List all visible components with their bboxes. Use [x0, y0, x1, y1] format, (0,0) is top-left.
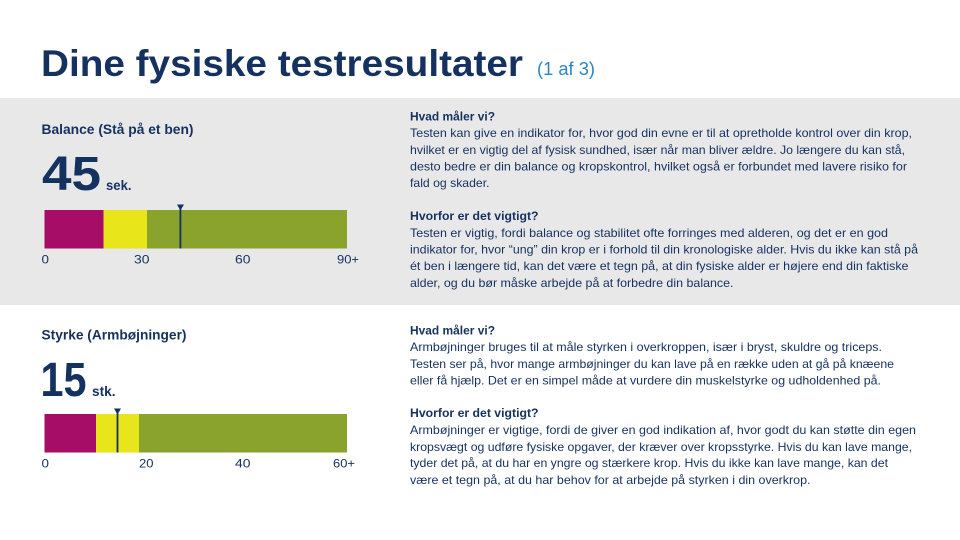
result value: 45 sek.: 45: [42, 147, 101, 201]
bar chart: strength: 40: [235, 456, 251, 470]
text block: balance, why it matters: indikator for, hvor “ung” din krop er i forhold til din kronologiske alder. Hvis du ikke kan stå på: [410, 242, 918, 256]
heading: strength: Styrke (Armbøjninger): [42, 328, 186, 342]
title: (1 af 3): [537, 59, 595, 79]
text block: strength, why it matters: Hvorfor er det vigtigt?: [410, 406, 538, 420]
text block: strength, why it matters: Armbøjninger er vigtige, fordi de giver en god indikation af, hvor godt du kan støtte din egen: [410, 423, 916, 437]
result value: 45 sek.: sek.: [106, 178, 132, 193]
text block: strength, what we measure: [410, 324, 894, 388]
text block: strength, what we measure: Armbøjninger bruges til at måle styrken i overkroppen, især i bryst, skuldre og triceps.: [410, 340, 882, 354]
text block: balance, what we measure: hvilket er en vigtig del af fysisk sundhed, især når man bliver ældre. Jo længere du kan stå,: [410, 143, 905, 157]
panel: strength: [40, 328, 355, 470]
bar chart: balance: [42, 204, 359, 266]
text block: strength, why it matters: kropsvægt og udføre fysiske opgaver, der kræver over kropsstyrke. Hvis du kan lave mange,: [410, 440, 912, 454]
bar chart: balance: 60: [235, 252, 251, 266]
title: Dine fysiske testresultater: [41, 43, 523, 84]
text block: strength, why it matters: [410, 406, 916, 487]
text block: balance, what we measure: Hvad måler vi?: [410, 110, 495, 124]
bar chart: strength: 20: [139, 456, 154, 470]
result value: 45 sek.: [42, 147, 132, 201]
text block: strength, why it matters: tyder det på, at du har en yngre og stærkere krop. Hvis du ikke kan lave mange, kan det: [410, 456, 889, 470]
text block: balance, what we measure: desto bedre er din balance og kropskontrol, hvilket også er forbundet med lavere risiko for: [410, 160, 907, 174]
text block: strength, what we measure: eller få hjælp. Det er en simpel måde at vurdere din muskelstyrke og udholdenhed på.: [410, 374, 881, 388]
bar chart: strength: 0: [42, 456, 49, 470]
text block: balance, why it matters: alder, og du bør måske arbejde på at forbedre din balance.: [410, 276, 734, 290]
bar chart: balance: 0: [42, 252, 49, 266]
text block: balance, what we measure: fald og skader.: [410, 176, 490, 190]
text block: balance, why it matters: Hvorfor er det vigtigt?: [410, 209, 538, 223]
text block: balance, what we measure: [410, 110, 912, 190]
result value: 15 stk.: stk.: [92, 384, 116, 399]
background band: [0, 98, 960, 305]
text block: strength, why it matters: være et tegn på, at du har behov for at arbejde på styrken i din overkrop.: [410, 473, 810, 487]
bar chart: strength: 60+: [333, 456, 355, 470]
bar chart: balance: 30: [134, 252, 150, 266]
bar chart: balance: 90+: [337, 252, 359, 266]
text block: balance, why it matters: [410, 209, 918, 290]
heading: balance: Balance (Stå på et ben): [42, 122, 194, 137]
bar chart: strength: [42, 408, 355, 470]
text block: balance, why it matters: ét ben i længere tid, kan det være et tegn på, at din fysiske alder er højere end din faktiske: [410, 259, 909, 273]
text block: balance, what we measure: Testen kan give en indikator for, hvor god din evne er til at opretholde kontrol over din krop,: [410, 126, 912, 140]
text block: strength, what we measure: Hvad måler vi?: [410, 324, 495, 338]
result value: 15 stk.: 15: [40, 353, 86, 407]
text block: strength, what we measure: Testen ser på, hvor mange armbøjninger du kan lave på en række uden at gå på knæene: [410, 357, 894, 371]
panel: balance: [42, 122, 359, 266]
text block: balance, why it matters: Testen er vigtig, fordi balance og stabilitet ofte forringes med alderen, og det er en god: [410, 226, 888, 240]
